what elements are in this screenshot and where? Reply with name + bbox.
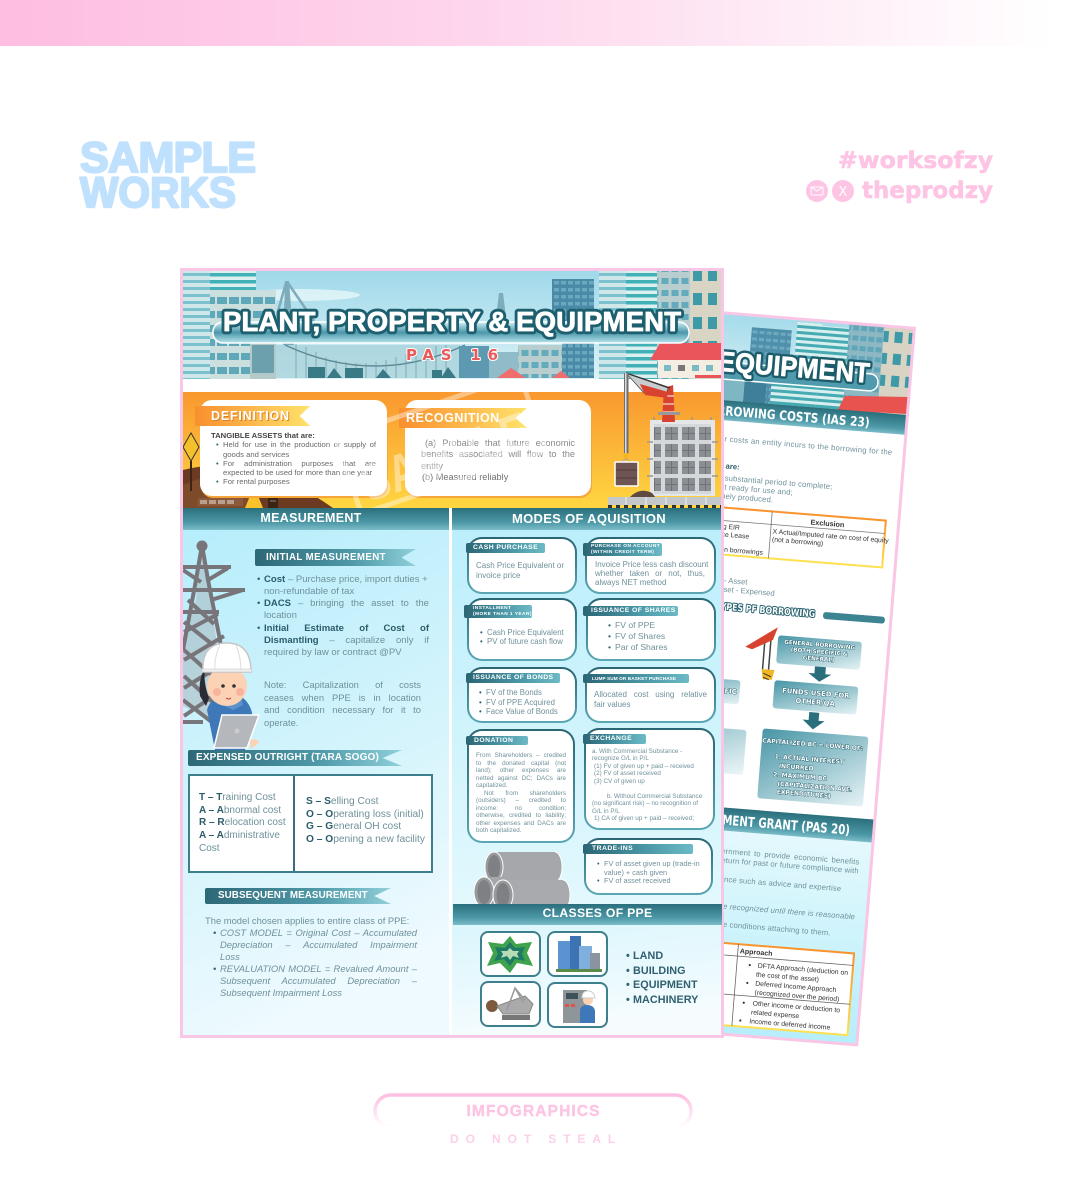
text: subsequent measurement: Loss xyxy=(220,951,240,962)
illustration: crane and building frame xyxy=(608,373,722,508)
back text: borrowing definition: Assets not ready for use and; xyxy=(689,480,793,497)
back table: inclusion and exclusion: Interest using EIR xyxy=(686,521,740,532)
text xyxy=(608,620,668,652)
subtitle: pas 16: PAS 16 xyxy=(406,346,498,364)
tag: (MORE THAN 1 YEAR) xyxy=(473,612,532,617)
back text: treatment xyxy=(664,571,776,598)
flow box: general borrowing xyxy=(776,635,862,670)
text: invoice price xyxy=(476,571,520,580)
card: cash purchase xyxy=(467,537,577,594)
tag xyxy=(583,674,689,683)
flow box: capitalized bc: EXPENDITURES) xyxy=(776,789,831,800)
text: always NET method xyxy=(595,578,666,587)
text: FV of PPE Acquired xyxy=(486,698,555,706)
back table: grant approach: Other income or deduction to xyxy=(752,1000,841,1014)
text: other expenses and DACs are xyxy=(476,820,566,826)
text: value) + cash given xyxy=(604,868,667,877)
watermark stamp: SAMPLE xyxy=(353,402,537,510)
back table: grant approach: (recognized over the period) xyxy=(754,990,840,1003)
back poster banner: EQUIPMENT xyxy=(717,346,871,389)
tag: DONATION xyxy=(474,737,513,744)
back table: inclusion and exclusion: Inclusion xyxy=(689,510,719,519)
text: capitalized. xyxy=(476,782,508,789)
back table: inclusion and exclusion: X Actual/Imputed rate on cost of equity xyxy=(772,529,889,545)
panel: orange band xyxy=(183,392,721,508)
flow box: specific capitalized: CAPITALIZED xyxy=(677,736,721,746)
flow box: general borrowing: GENERAL) xyxy=(802,655,835,664)
text: land); other expenses are xyxy=(476,767,566,774)
tag: LUMP SUM OR BASKET PURCHASE xyxy=(592,676,676,681)
text: (3) CV of given up xyxy=(594,778,645,785)
text: both capitalized. xyxy=(476,827,522,834)
back text: government grant definition: assurance of complying with the conditions attaching to them. xyxy=(614,911,831,937)
back subheading: types of borrowing: TYPES PF BORROWING xyxy=(715,601,816,620)
back table: grant approach: DFTA Approach (deduction on xyxy=(757,963,848,977)
text: FV of asset given up (trade-in xyxy=(604,859,700,868)
tag: INSTALLMENT xyxy=(473,606,511,610)
back text: treatment: Qualifying - Asset xyxy=(687,573,749,587)
text: initial measurement items: Initial Estimate of Cost of xyxy=(264,623,429,634)
text: initial measurement items: location xyxy=(264,610,297,621)
panel: definition xyxy=(200,400,387,496)
column backgrounds xyxy=(183,508,721,1035)
arrow xyxy=(802,712,825,730)
column: sogo xyxy=(306,796,425,845)
tag xyxy=(583,734,646,744)
text: FV of Shares xyxy=(615,630,665,640)
text: income: no condition; xyxy=(476,804,566,812)
arrow xyxy=(808,666,832,683)
text xyxy=(476,752,566,834)
flow box: capitalized bc: CAPITALIZED BC = LOWER OF: xyxy=(762,737,863,752)
tile: land xyxy=(481,932,540,976)
back header: government grant: GOVERNMENT GRANT (PAS 20) xyxy=(674,809,851,839)
text: netted against DC; DACs are xyxy=(476,774,566,782)
header: classes of ppe xyxy=(453,904,722,925)
recognition ribbon xyxy=(399,408,527,428)
tag: CASH PURCHASE xyxy=(473,544,538,551)
recognition text: benefits associated will flow to the xyxy=(421,449,575,459)
back text: borrowing definition xyxy=(584,424,893,514)
text: PV of future cash flow xyxy=(487,637,563,646)
back text: government grant definition: Excludes assistance such as advice and expertise xyxy=(665,870,842,893)
text xyxy=(595,560,708,587)
text: FV of PPE xyxy=(615,620,655,630)
tile: building xyxy=(548,932,607,976)
flow box: general borrowing: GENERAL BORROWING xyxy=(784,640,856,652)
text: subsequent measurement: Subsequent Impairment Loss xyxy=(220,987,342,998)
text: FV of asset received xyxy=(604,876,671,885)
back text: borrowing definition: Routinely produced. xyxy=(702,490,774,504)
back poster: borrowing costs and government grant xyxy=(589,311,916,1046)
back text: borrowing definition: Assets that take a substantial period to complete; xyxy=(659,468,833,491)
tag: ISSUANCE OF SHARES xyxy=(591,607,676,614)
column: tara: A – Abnormal cost xyxy=(199,805,281,816)
tag: EXCHANGE xyxy=(590,735,632,742)
list: classes of ppe: EQUIPMENT xyxy=(633,979,698,991)
footer text: do not steal: DO NOT STEAL xyxy=(450,1132,622,1146)
back table: grant approach: Approach xyxy=(740,948,773,958)
card: purchase on account xyxy=(585,537,716,594)
text: initial measurement items: required by law or contract @PV xyxy=(264,647,402,658)
text: capitalization note xyxy=(264,679,421,728)
list: classes of ppe xyxy=(626,950,698,1006)
column: tara: A – Administrative xyxy=(199,830,280,841)
footer badge: imfographics xyxy=(373,1093,693,1123)
text: recognize G/L in P/L xyxy=(592,755,649,762)
text: subsequent measurement: COST MODEL = Original Cost – Accumulated xyxy=(220,927,417,938)
card: issuance of shares xyxy=(586,598,716,661)
recognition text: (b) Measured reliably xyxy=(422,472,508,482)
list: classes of ppe: BUILDING xyxy=(633,964,686,976)
back header: borrowing costs: BORROWING COSTS (IAS 23) xyxy=(700,402,870,431)
back text: treatment: Non-qualifying asset - Expensed xyxy=(664,580,775,598)
tile: equipment xyxy=(481,982,540,1026)
back text: government grant definition: Grants should not be recognized until there is reasonable xyxy=(654,896,855,921)
column: sogo: G – General OH cost xyxy=(306,821,401,832)
handles: social tag: #worksofzy xyxy=(838,148,993,174)
definition text xyxy=(211,431,376,486)
back poster banner xyxy=(399,287,914,418)
text xyxy=(592,748,702,822)
back table: inclusion and exclusion: (not a borrowing) xyxy=(772,537,823,548)
header: modes of acquisition xyxy=(452,508,721,530)
text xyxy=(594,690,707,709)
text: (1) FV of given up + paid – received xyxy=(594,763,694,770)
flow box: specific: SPECIFIC xyxy=(702,685,737,696)
main poster: plant, property and equipment xyxy=(180,268,724,1038)
flow box: funds used: OTHER/QA xyxy=(795,697,836,708)
header: measurement xyxy=(183,508,449,530)
tag xyxy=(583,606,678,616)
back table: grant approach: the cost of the asset) xyxy=(756,972,819,984)
recognition text xyxy=(421,438,575,482)
text: initial measurement items: non-refundable of tax xyxy=(264,586,354,597)
footer badge: imfographics: IMFOGRAPHICS xyxy=(466,1103,600,1120)
definition text: expected to be used for more than one year xyxy=(223,468,372,477)
text: initial measurement items: Cost – Purchase price, import duties + xyxy=(264,574,428,585)
tag xyxy=(583,844,693,854)
ribbon: subsequent measurement xyxy=(205,888,391,904)
banner: city skyline xyxy=(183,271,721,379)
tag xyxy=(466,543,545,553)
text: subsequent measurement: Subsequent Accumulated Depreciation – xyxy=(220,975,417,986)
heading: sample works: SAMPLE xyxy=(80,134,256,182)
text xyxy=(476,561,564,580)
text: Cash Price Equivalent or xyxy=(476,561,564,570)
text: initial measurement items: DACS – bringing the asset to the xyxy=(264,598,429,609)
flow box: capitalized bc xyxy=(757,728,868,807)
back table: inclusion and exclusion: Interest on Finance Lease xyxy=(670,527,750,541)
table: tara sogo xyxy=(188,774,433,873)
handles: social tag: theprodzy xyxy=(862,178,993,204)
text: From Shareholders – credited xyxy=(476,752,566,759)
back table: inclusion and exclusion xyxy=(407,482,891,568)
recognition text: entity xyxy=(421,461,443,471)
back text: government grant definition: to an entity in return for past or future compliance with xyxy=(669,851,859,876)
text xyxy=(597,859,700,885)
text: Par of Shares xyxy=(615,642,668,652)
definition ribbon: DEFINITION xyxy=(211,409,290,423)
text xyxy=(480,628,564,646)
illustration: concrete pipes xyxy=(474,852,570,910)
text: Not from shareholders xyxy=(484,790,566,796)
definition text: For administration purposes that are xyxy=(223,459,376,468)
list: classes of ppe: MACHINERY xyxy=(633,994,698,1006)
panel: recognition xyxy=(405,400,591,496)
ribbon: expensed outright: EXPENSED OUTRIGHT (TARA SOGO) xyxy=(196,752,379,763)
text: subsequent measurement: Depreciation – Accumulated Impairment xyxy=(220,939,417,950)
tag: (WITHIN CREDIT TERM) xyxy=(591,550,654,555)
column: tara: R – Relocation cost xyxy=(199,817,286,828)
back table: grant approach: Income or deferred income xyxy=(749,1018,831,1032)
text: Invoice Price less cash discount xyxy=(595,560,708,569)
card: issuance of bonds xyxy=(467,667,577,723)
text: subsequent measurement xyxy=(205,915,418,998)
recognition ribbon: RECOGNITION xyxy=(406,411,500,425)
text: G/L in P/L xyxy=(592,808,620,815)
text: otherwise, credited to liability; xyxy=(476,812,566,819)
flow box: specific capitalized: COST xyxy=(691,757,710,765)
back header: government grant xyxy=(365,779,875,843)
text xyxy=(479,688,558,716)
text: Cash Price Equivalent xyxy=(487,628,564,636)
column: sogo: O – Opening a new facility xyxy=(306,834,425,845)
text: subsequent measurement: The model chosen applies to entire class of PPE: xyxy=(205,915,409,926)
back text: government grant definition xyxy=(614,838,860,939)
illustration: worker with tablet xyxy=(200,643,259,750)
flow box: capitalized bc: 1. ACTUAL INTEREST xyxy=(774,753,845,766)
flow box: funds used xyxy=(772,680,858,715)
ribbon: expensed outright xyxy=(188,750,402,766)
text: whether taken or not, thus, xyxy=(595,569,705,578)
tag xyxy=(464,605,532,618)
text: b. Without Commercial Substance xyxy=(607,793,702,800)
heading: sample works: WORKS xyxy=(80,169,236,217)
icon: mail xyxy=(806,180,828,202)
back table: grant approach: related expense xyxy=(751,1009,800,1020)
text: capitalization note: ceases when PPE is in location xyxy=(264,692,421,703)
heading: sample works xyxy=(79,134,256,217)
text: (2) FV of asset received xyxy=(594,770,661,777)
back table: inclusion and exclusion: Exclusion xyxy=(810,518,845,529)
text: (outsiders) – credited to xyxy=(476,797,566,804)
tag: ISSUANCE OF BONDS xyxy=(473,674,554,681)
back poster banner: EQUIPMENT xyxy=(717,346,871,389)
text: initial measurement items: Dismantling – capitalize only if xyxy=(264,635,429,646)
flow box: capitalized bc: INCURRED xyxy=(779,763,814,773)
definition text: For rental purposes xyxy=(223,477,290,486)
ribbon: initial measurement xyxy=(255,549,416,566)
column: tara xyxy=(199,792,286,854)
back table: grant approach xyxy=(419,919,854,1035)
definition text: Held for use in the production or supply of xyxy=(223,440,376,449)
text: 1) CA of given up + paid – received; xyxy=(594,815,694,822)
back illustration: crane xyxy=(636,616,778,680)
list: classes of ppe: LAND xyxy=(633,950,663,962)
card: installment xyxy=(467,598,577,661)
top gradient bar xyxy=(0,0,1066,46)
flow box: specific capitalized: BC = ACTUAL xyxy=(677,746,722,756)
text: to the donated capital (not xyxy=(476,760,566,766)
back text: borrowing definition: Borrowing costs are interest and other costs an entity incurs to the borrowing for the xyxy=(589,424,893,457)
text: fair values xyxy=(594,700,630,709)
text: capitalization note: and condition necessary for it to xyxy=(264,704,421,715)
definition text: TANGIBLE ASSETS that are: xyxy=(211,431,315,440)
definition ribbon xyxy=(195,406,310,426)
illustration: transmission tower xyxy=(183,542,245,726)
back subheading: types of borrowing xyxy=(715,601,885,626)
card: exchange xyxy=(584,728,715,830)
text: (no significant risk) – no recognition of xyxy=(592,800,698,807)
card: trade-ins xyxy=(584,838,713,895)
column: tara: Cost xyxy=(199,843,220,854)
ribbon: initial measurement: INITIAL MEASUREMENT xyxy=(266,552,386,563)
tag xyxy=(466,673,560,683)
title: PLANT, PROPERTY & EQUIPMENT xyxy=(223,306,681,337)
text: Face Value of Bonds xyxy=(486,707,558,716)
definition text: goods and services xyxy=(223,450,289,459)
tag: TRADE-INS xyxy=(592,845,633,852)
column: sogo: O – Operating loss (initial) xyxy=(306,809,424,820)
flow box: funds used: FUNDS USED FOR xyxy=(782,687,850,700)
recognition text: (a) Probable that future economic xyxy=(425,438,575,448)
flow box: specific capitalized xyxy=(628,721,747,775)
text: a. With Commercial Substance - xyxy=(592,748,682,755)
back text: borrowing definition: Qualifying assets are: xyxy=(660,456,740,472)
flow box: capitalized bc: (CAPITALIZATION AVE. xyxy=(777,781,852,794)
card: lump sum xyxy=(585,667,716,723)
header: classes of ppe: CLASSES OF PPE xyxy=(543,906,652,920)
back header: borrowing costs xyxy=(397,374,907,435)
text: subsequent measurement: REVALUATION MODEL = Revalued Amount – xyxy=(220,963,417,974)
column: tara: T – Training Cost xyxy=(199,792,276,803)
title: PLANT, PROPERTY & EQUIPMENT xyxy=(223,306,681,337)
text: Allocated cost using relative xyxy=(594,690,707,699)
back table: grant approach: Deferred Income Approach xyxy=(755,981,837,994)
text: capitalization note: operate. xyxy=(264,717,298,728)
handles: social tag xyxy=(806,148,993,204)
column: sogo: S – Selling Cost xyxy=(306,796,378,807)
tag xyxy=(466,736,528,745)
text: initial measurement items xyxy=(257,574,430,658)
tag: PURCHASE ON ACCOUNT xyxy=(591,544,660,548)
text: FV of the Bonds xyxy=(486,688,542,697)
back text: government grant definition: Assistance by government to provide economic benefits xyxy=(654,841,860,867)
flow box: general borrowing: (BOTH SPECIFIC & xyxy=(790,647,848,658)
header: measurement: MEASUREMENT xyxy=(260,511,362,525)
card: donation xyxy=(467,729,575,843)
icon: x: X xyxy=(839,185,848,200)
tile: machinery xyxy=(548,983,607,1027)
text: capitalization note: Note: Capitalization of costs xyxy=(264,679,421,690)
back table: inclusion and exclusion: FX differences on borrowings xyxy=(675,543,764,557)
flow box: specific xyxy=(634,672,741,704)
icon: x xyxy=(832,180,854,202)
flow box: capitalized bc: 2. MAXIMUM BC xyxy=(773,771,828,783)
tag xyxy=(583,543,662,556)
header: modes of acquisition: MODES OF AQUISITION xyxy=(512,511,666,526)
ribbon: subsequent measurement: SUBSEQUENT MEASUREMENT xyxy=(218,890,368,901)
